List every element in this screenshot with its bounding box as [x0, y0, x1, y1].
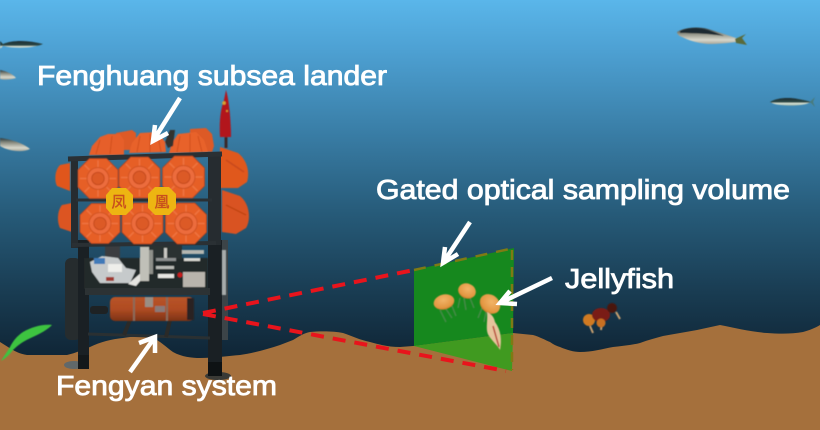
fish: left mackerel	[0, 41, 43, 49]
olive dashed line: right edge of panel	[511, 250, 513, 370]
back side floats	[55, 147, 249, 234]
gated optical sampling volume panel	[414, 248, 514, 371]
tube and legs	[64, 240, 231, 380]
label: Jellyfish: Jellyfish	[565, 263, 674, 294]
arrow: to sampling volume	[443, 222, 470, 263]
panel lower part over seabed	[414, 333, 513, 371]
yellow badge: feng: 凤	[111, 194, 127, 211]
olive dashed line: top of panel	[414, 248, 514, 270]
arrow: to lander	[153, 98, 180, 141]
seabed	[0, 325, 820, 430]
front floats	[78, 156, 206, 244]
jellyfish group in panel	[432, 281, 504, 350]
yellow badge: huang	[148, 187, 176, 215]
label: Fengyan system: Fengyan system	[56, 370, 277, 401]
red dashed line: lower sight line	[203, 314, 506, 371]
Fengyan tank	[110, 297, 194, 321]
seaweed leaf	[1, 325, 52, 361]
flag	[220, 90, 231, 148]
arrow: to jellyfish	[500, 278, 552, 304]
arrow: to Fengyan system	[130, 337, 155, 372]
label: Fenghuang subsea lander: Fenghuang subsea lander	[37, 60, 387, 91]
yellow badge: feng	[106, 188, 133, 215]
jellyfish group outside panel	[583, 303, 620, 333]
fish: right mackerel	[770, 97, 815, 107]
fish: left small	[0, 70, 16, 80]
fish: upper right trout	[677, 28, 747, 45]
top floats	[89, 128, 214, 155]
red dashed line: upper sight line	[203, 270, 414, 313]
machinery	[84, 245, 226, 295]
label: Gated optical sampling volume: Gated optical sampling volume	[376, 174, 790, 205]
shelf bars	[85, 288, 210, 338]
fish: left lower	[0, 138, 30, 151]
Fenghuang subsea lander	[55, 90, 249, 380]
yellow badge: huang: 凰	[154, 194, 170, 211]
front frame	[68, 153, 222, 248]
